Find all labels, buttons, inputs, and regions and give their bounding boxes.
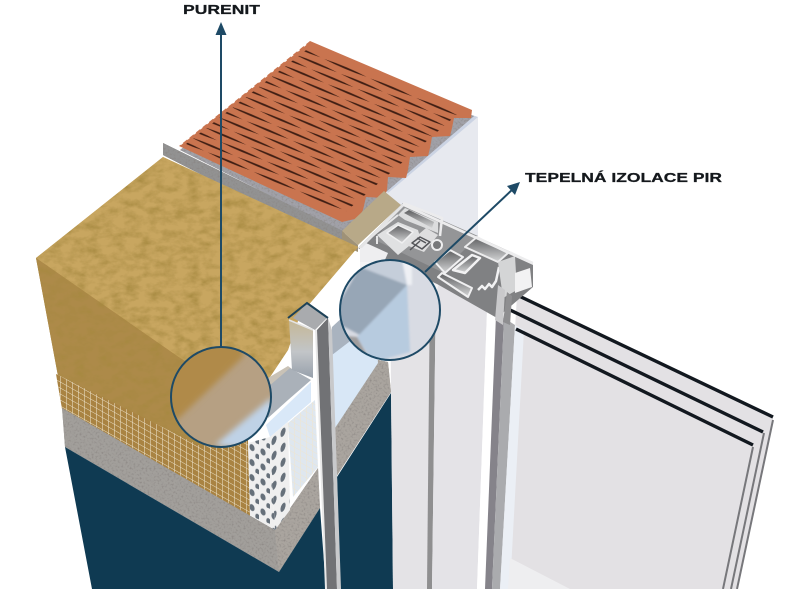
white wall behind bricks <box>384 115 478 252</box>
concrete plinth <box>62 360 391 572</box>
magnifier: PIR insulation detail <box>335 255 440 365</box>
beige Purenit block <box>342 191 401 252</box>
glass panes <box>485 295 773 589</box>
concrete strip <box>163 143 345 247</box>
window frame sash <box>360 246 496 589</box>
aluminium channel profile <box>288 303 341 589</box>
navy wall <box>65 393 393 589</box>
label: Tepelná izolace PIR: TEPELNÁ IZOLACE PIR <box>525 170 723 185</box>
corner bead with perforations <box>248 400 318 530</box>
EPS foam and Purenit edge <box>266 290 410 437</box>
mineral wool insulation <box>36 157 358 447</box>
extruded frame profile section <box>358 203 533 325</box>
arrow: Purenit leader <box>216 22 226 347</box>
mortar layer under bricks <box>180 60 474 233</box>
magnifier: purenit detail <box>170 346 272 448</box>
reinforcing mesh <box>56 374 250 516</box>
label: PURENIT: PURENIT <box>183 2 260 17</box>
brick block <box>179 41 472 222</box>
arrow: PIR leader <box>425 182 520 272</box>
